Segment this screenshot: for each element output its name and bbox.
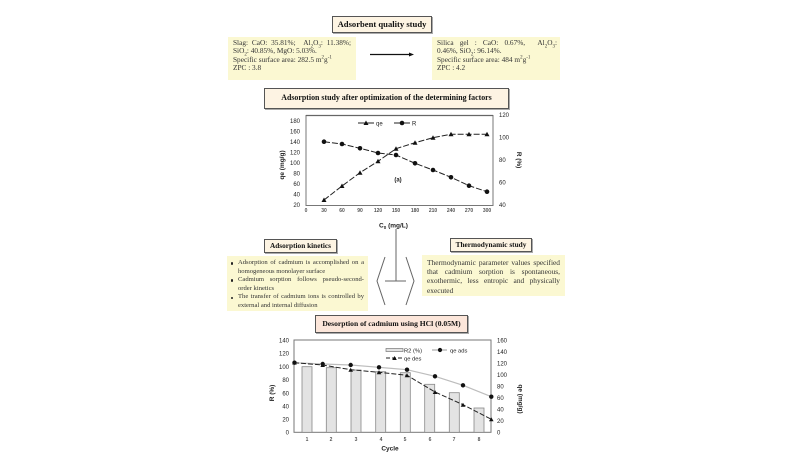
text block: thermodynamic findings: exothermic, less entropic and physically <box>427 276 560 285</box>
heading: adsorption study after optimization <box>264 88 509 109</box>
heading: thermodynamic study: Thermodynamic study <box>456 240 526 249</box>
right axis labels <box>499 113 510 209</box>
right axis labels: 160 <box>497 338 508 344</box>
right axis labels: 100 <box>499 136 510 142</box>
axis titles: R (%) <box>269 385 276 401</box>
right axis labels: 60 <box>497 396 504 402</box>
right axis labels: 120 <box>497 362 508 368</box>
left axis labels: 100 <box>279 365 290 371</box>
left axis labels: 180 <box>290 119 301 125</box>
left axis labels: 0 <box>286 430 290 436</box>
left axis labels: 140 <box>279 338 290 344</box>
text block: silica gel properties <box>432 37 560 80</box>
axis titles: Cycle <box>381 446 399 452</box>
axis titles: qe (mg/g) <box>516 384 524 414</box>
axis titles <box>279 150 522 230</box>
right axis labels: 0 <box>497 430 501 436</box>
arrow: split to both study panels <box>376 229 414 306</box>
x axis labels: 60 <box>339 208 345 214</box>
x axis labels: 150 <box>392 208 400 214</box>
x axis labels: 1 <box>306 437 309 443</box>
left axis labels: 60 <box>282 391 290 397</box>
axis titles: (a) <box>394 178 402 184</box>
series: R <box>322 139 489 194</box>
x axis labels: 30 <box>321 208 327 214</box>
heading: adsorbent quality study: Adsorbent quality study <box>338 19 426 29</box>
text block: slag properties: SiO2: 40.85%, MgO: 5.03%. <box>233 46 317 58</box>
legend: qe des <box>404 356 422 362</box>
text block: silica gel properties: Specific surface area: 484 m2g-1 <box>437 55 530 64</box>
right axis labels: 40 <box>497 408 504 414</box>
bars: R2 <box>302 367 484 432</box>
left axis labels <box>279 338 290 436</box>
heading: desorption of cadmium: Desorption of cadmium using HCl (0.05M) <box>322 319 461 328</box>
left axis labels: 40 <box>293 192 301 198</box>
text block: kinetics findings <box>227 256 368 311</box>
heading: thermodynamic study <box>450 238 532 252</box>
right axis labels: 80 <box>497 384 504 390</box>
right axis labels: 60 <box>499 180 506 186</box>
text block: slag properties: ZPC : 3.8 <box>233 63 261 72</box>
text block: slag properties: Specific surface area: 282.5 m2g-1 <box>233 55 332 64</box>
axis titles: (mg/L) <box>386 222 408 230</box>
x axis labels: 2 <box>330 437 333 443</box>
left axis labels: 20 <box>293 203 301 209</box>
right axis labels: 140 <box>497 350 508 356</box>
x axis labels: 8 <box>478 437 481 443</box>
text block: kinetics findings: Adsorption of cadmium is accomplished on a <box>238 259 364 266</box>
right axis labels: 80 <box>499 158 506 164</box>
legend: qe ads <box>450 348 468 354</box>
x axis labels: 5 <box>404 437 407 443</box>
text block: kinetics findings: homogeneous monolayer surface <box>238 268 325 275</box>
series: qe <box>322 132 490 202</box>
right axis labels: 40 <box>499 203 506 209</box>
text block: kinetics findings: Cadmium sorption follows pseudo-second- <box>238 276 364 283</box>
axis titles: 0 <box>384 225 387 230</box>
x axis labels: 7 <box>453 437 456 443</box>
left axis labels <box>290 119 301 209</box>
text block: silica gel properties: 0.46%, SiO2: 96.14%. <box>437 46 502 58</box>
text block: thermodynamic findings <box>422 255 565 296</box>
left axis labels: 120 <box>290 150 301 156</box>
text block: kinetics findings: The transfer of cadmium ions is controlled by <box>238 293 364 300</box>
left axis labels: 60 <box>293 182 301 188</box>
chart: qe and R versus C0 <box>279 112 522 230</box>
x axis labels: 3 <box>355 437 358 443</box>
left axis labels: 160 <box>290 130 301 136</box>
x axis labels: 240 <box>447 208 455 214</box>
left axis labels: 100 <box>290 161 301 167</box>
heading: adsorption kinetics <box>264 239 337 253</box>
right axis labels <box>497 338 508 436</box>
x axis labels: 270 <box>465 208 473 214</box>
right axis labels: 100 <box>497 373 508 379</box>
heading: adsorbent quality study <box>332 16 432 33</box>
legend: R <box>412 122 417 128</box>
heading: adsorption kinetics: Adsorption kinetics <box>270 241 331 250</box>
right axis labels: 20 <box>497 419 504 425</box>
x axis labels: 180 <box>411 208 419 214</box>
text block: slag properties <box>228 37 356 80</box>
x axis labels <box>305 208 491 214</box>
heading: desorption of cadmium <box>315 315 468 333</box>
text block: slag properties: Slag: CaO: 35.81%; Al2O3: 11.38%; <box>233 38 351 49</box>
left axis labels: 80 <box>282 378 290 384</box>
text block: kinetics findings: external and internal diffusion <box>238 302 318 309</box>
left axis labels: 120 <box>279 352 290 358</box>
chart: desorption cycles <box>269 338 524 452</box>
legend <box>358 120 417 128</box>
legend: R2 (%) <box>404 348 422 354</box>
text block: thermodynamic findings: Thermodynamic parameter values specified <box>427 258 560 266</box>
axis titles: qe (mg/g) <box>279 150 286 180</box>
series: qe des <box>292 360 494 421</box>
x axis labels: 300 <box>483 208 491 214</box>
legend <box>386 348 468 362</box>
axis titles <box>269 384 524 452</box>
left axis labels: 80 <box>293 172 301 178</box>
right axis labels: 120 <box>499 113 510 119</box>
text block: silica gel properties: ZPC : 4.2 <box>437 63 465 72</box>
text block: thermodynamic findings: that cadmium sorption is spontaneous, <box>427 267 560 276</box>
x axis labels: 6 <box>429 437 432 443</box>
x axis labels: 90 <box>357 208 363 214</box>
x axis labels <box>306 437 481 443</box>
text block: silica gel properties: Silica gel : CaO: 0.67%, Al2O3: <box>437 38 557 49</box>
arrow: slag to silica gel <box>370 52 414 56</box>
legend: qe <box>376 122 383 128</box>
text block: kinetics findings: order kinetics <box>238 285 274 292</box>
left axis labels: 40 <box>282 404 290 410</box>
x axis labels: 4 <box>380 437 383 443</box>
x axis labels: 0 <box>305 208 308 214</box>
text block: thermodynamic findings: executed <box>427 286 453 295</box>
axis titles: C <box>379 222 384 230</box>
series: qe ads <box>292 360 493 399</box>
heading: adsorption study after optimization: Adsorption study after optimization of the determining factors <box>281 93 492 102</box>
axis titles: R (%) <box>515 152 522 168</box>
left axis labels: 20 <box>282 418 290 424</box>
left axis labels: 140 <box>290 140 301 146</box>
x axis labels: 120 <box>374 208 382 214</box>
x axis labels: 210 <box>429 208 437 214</box>
